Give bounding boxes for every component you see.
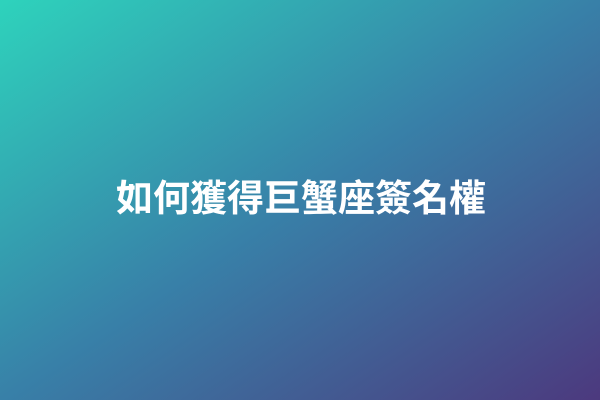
- title: 如何獲得巨蟹座簽名權: [116, 178, 486, 219]
